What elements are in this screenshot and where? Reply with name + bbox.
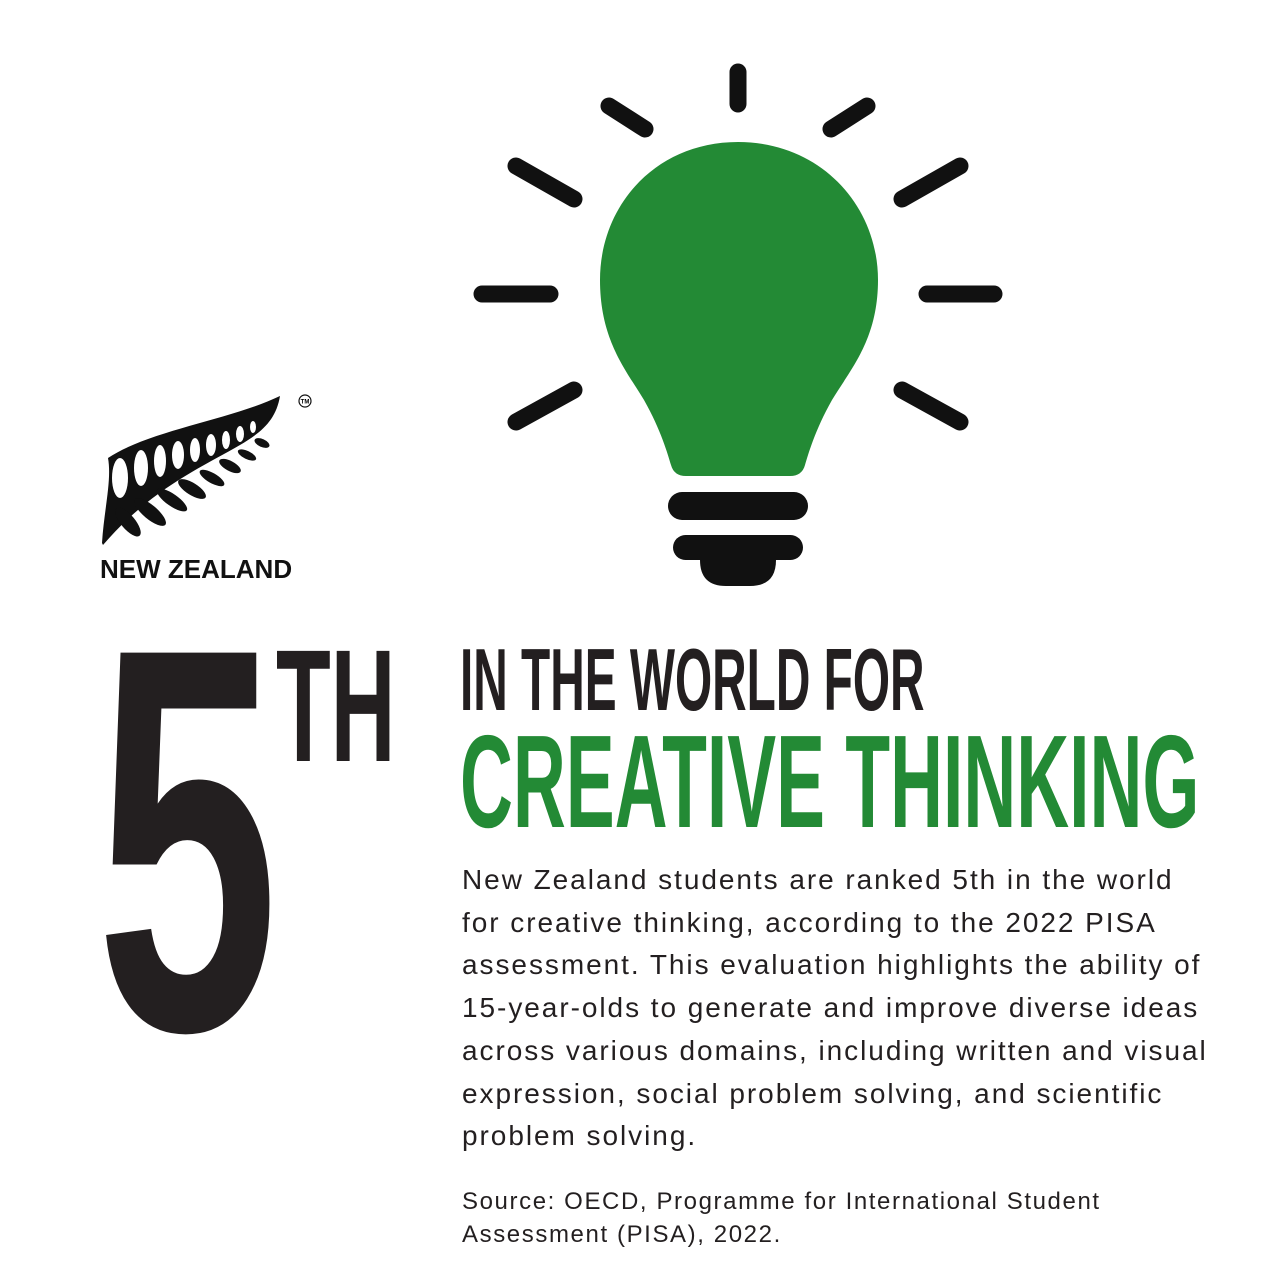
body text: assessment. This evaluation highlights the ability of (462, 949, 1201, 980)
body text: New Zealand students are ranked 5th in the world (462, 864, 1174, 895)
logo text: NEW ZEALAND (100, 554, 292, 584)
source note: Assessment (PISA), 2022. (462, 1221, 782, 1248)
logo: silver fern (102, 394, 312, 545)
icon: light bulb (474, 64, 1002, 586)
heading line 2: CREATIVE THINKING (460, 708, 1199, 855)
heading line 1: IN THE WORLD FOR (460, 630, 925, 729)
body text: 15-year-olds to generate and improve diverse ideas (462, 992, 1199, 1023)
big number 5: 5 (96, 534, 279, 1145)
body text: expression, social problem solving, and scientific (462, 1078, 1163, 1109)
superscript TH: TH (276, 616, 395, 795)
body text (462, 864, 1208, 1151)
logo: silver fern: TM (301, 400, 309, 406)
body text: across various domains, including written and visual (462, 1035, 1208, 1066)
source note (462, 1188, 1101, 1248)
body text: for creative thinking, according to the 2022 PISA (462, 907, 1157, 938)
source note: Source: OECD, Programme for International Student (462, 1188, 1101, 1215)
body text: problem solving. (462, 1120, 697, 1151)
